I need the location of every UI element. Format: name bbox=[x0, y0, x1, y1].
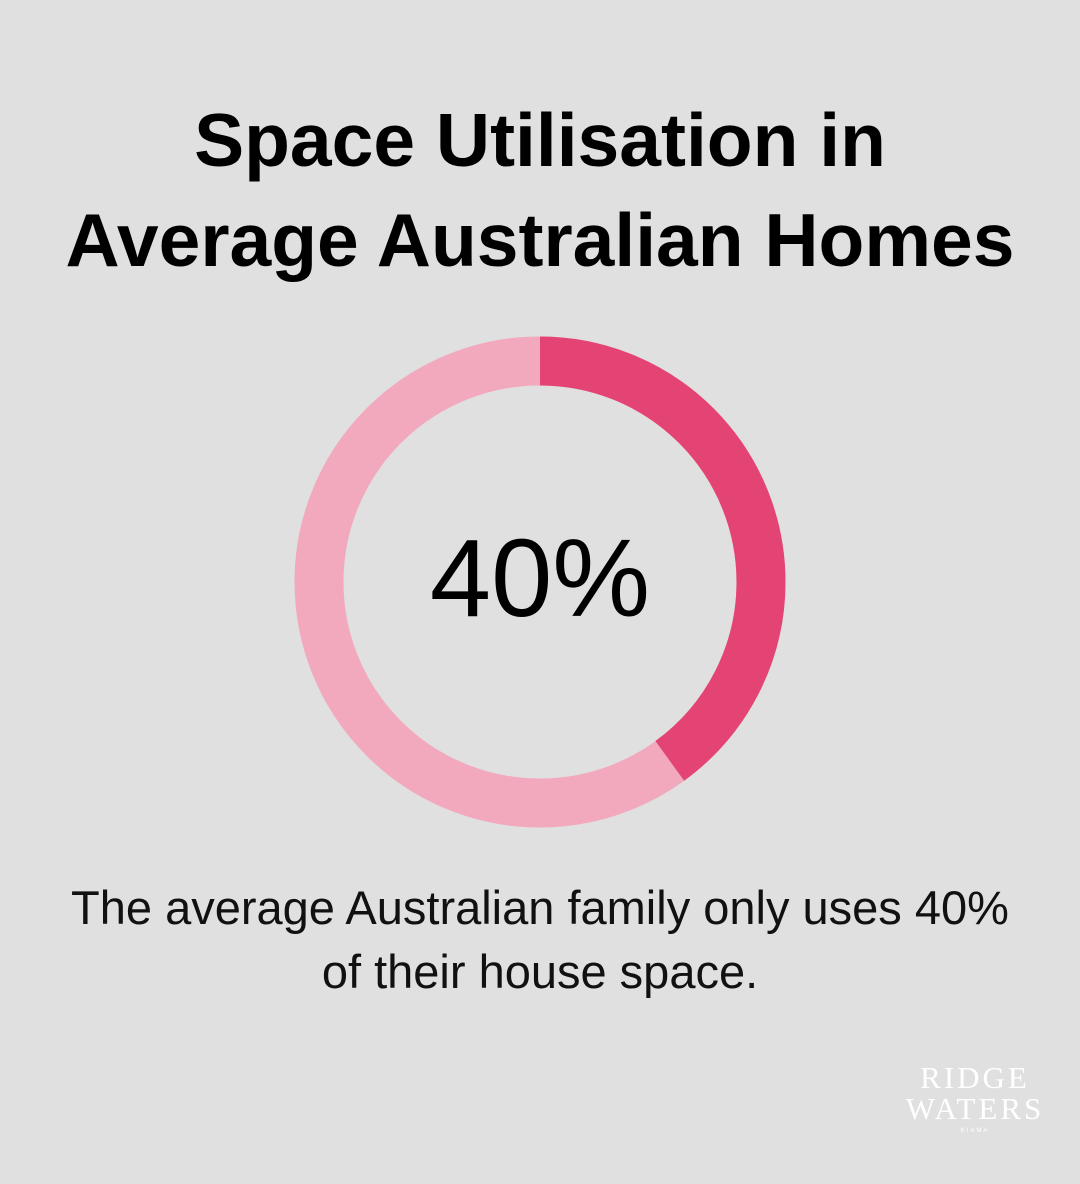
description: The average Australian family only uses 40% bbox=[71, 881, 1009, 934]
title: Average Australian Homes bbox=[66, 198, 1014, 282]
logo: WATERS bbox=[906, 1091, 1044, 1126]
logo bbox=[906, 1060, 1044, 1134]
logo: KIAMA bbox=[961, 1128, 989, 1134]
title bbox=[66, 98, 1014, 282]
donut chart: 40% bbox=[430, 517, 650, 640]
description: of their house space. bbox=[322, 945, 758, 998]
title: Space Utilisation in bbox=[194, 98, 886, 182]
description bbox=[71, 881, 1009, 998]
logo: RIDGE bbox=[920, 1060, 1030, 1095]
